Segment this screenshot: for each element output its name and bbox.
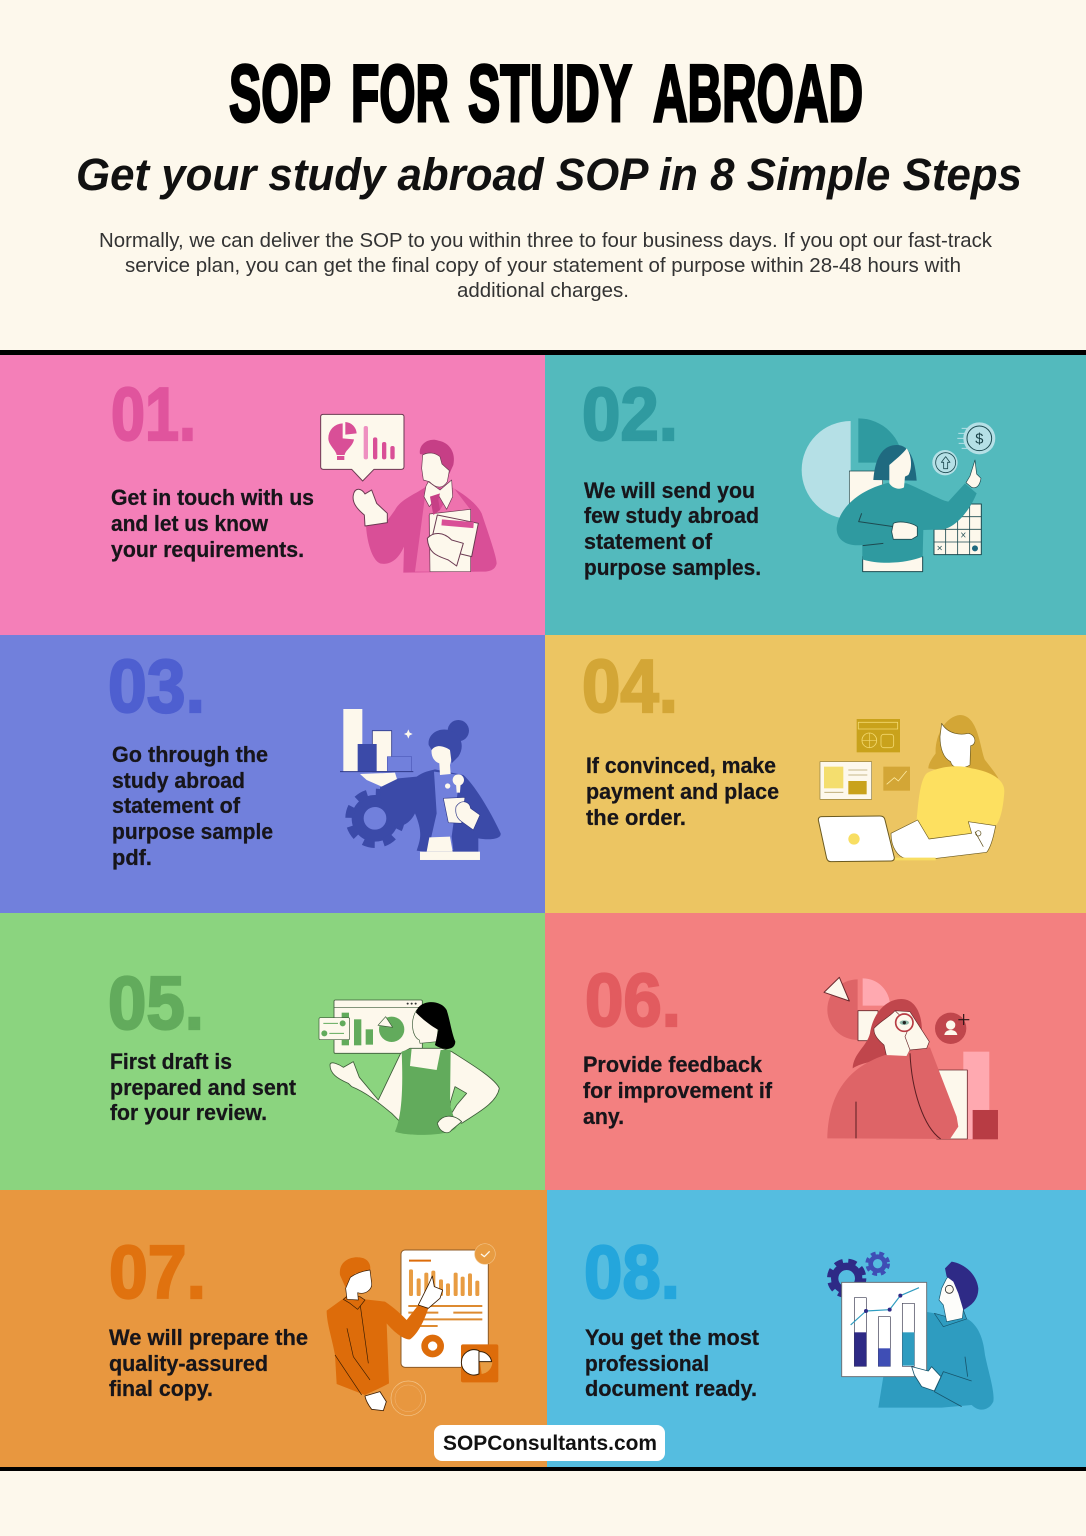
intro paragraph — [99, 229, 993, 302]
panel: step 03 — [0, 635, 545, 913]
subtitle: Get your study abroad SOP in 8 Simple Steps — [76, 149, 1022, 200]
icon: man presenting report — [327, 1244, 498, 1416]
step 04 text: the order. — [586, 805, 686, 830]
panel: step 01 — [0, 355, 545, 635]
step 01 text: and let us know — [111, 511, 269, 536]
step number 04: 04. — [582, 644, 678, 728]
icon: woman pointing at coin — [802, 418, 995, 572]
step number 03: 03. — [108, 644, 205, 728]
title: ABROAD — [653, 49, 863, 139]
step 03 text: pdf. — [112, 845, 152, 870]
step 02 text: few study abroad — [584, 503, 759, 528]
intro paragraph: Normally, we can deliver the SOP to you within three to four business days. If you opt our fast-track — [99, 229, 993, 252]
step 04 text — [586, 753, 779, 830]
website badge: SOPConsultants.com — [443, 1432, 657, 1455]
step 03 text — [112, 742, 273, 870]
step 03 text: purpose sample — [112, 819, 273, 844]
icon: woman at laptop — [818, 715, 1004, 862]
icon: man with speech bubble — [321, 414, 497, 573]
step 08 text: professional — [585, 1351, 709, 1376]
step 07 text — [109, 1325, 308, 1401]
step 03 text: study abroad — [112, 768, 245, 793]
icon: woman pointing at coin: $ — [975, 431, 983, 447]
title: STUDY — [468, 49, 632, 139]
title — [229, 49, 863, 139]
intro paragraph: additional charges. — [457, 279, 629, 302]
icon: man with chart board — [830, 1253, 994, 1410]
step 02 text: purpose samples. — [584, 555, 761, 580]
step number 01: 01. — [111, 372, 196, 456]
step number 07: 07. — [109, 1230, 206, 1314]
step 01 text — [111, 485, 314, 562]
panel: step 07 — [0, 1190, 547, 1467]
step number 08: 08. — [584, 1230, 680, 1314]
step 02 text: statement of — [584, 529, 713, 554]
step 01 text: Get in touch with us — [111, 485, 314, 510]
step 03 text: Go through the — [112, 742, 268, 767]
step 04 text: payment and place — [586, 779, 779, 804]
panel: step 04 — [545, 635, 1086, 913]
step 07 text: quality-assured — [109, 1351, 268, 1376]
icon: woman with magnifier — [824, 977, 998, 1139]
icon: woman with gear and bars — [340, 709, 501, 860]
panel: step 02 — [545, 355, 1086, 635]
step 02 text: We will send you — [584, 478, 755, 503]
step 06 text — [583, 1052, 773, 1129]
step number 02: 02. — [582, 372, 678, 456]
step 05 text: First draft is — [110, 1049, 232, 1074]
intro paragraph: service plan, you can get the final copy of your statement of purpose within 28-48 hours with — [125, 254, 961, 277]
step number 05: 05. — [108, 961, 204, 1045]
step 03 text: statement of — [112, 793, 241, 818]
step 07 text: final copy. — [109, 1376, 213, 1401]
title: FOR — [351, 49, 449, 139]
panel: step 06 — [545, 913, 1086, 1190]
panel: step 05 — [0, 913, 545, 1190]
step 05 text — [110, 1049, 297, 1125]
step 08 text: document ready. — [585, 1376, 757, 1401]
step 06 text: any. — [583, 1104, 624, 1129]
website badge — [434, 1425, 665, 1461]
step 05 text: prepared and sent — [110, 1075, 297, 1100]
step 06 text: Provide feedback — [583, 1052, 763, 1077]
step 04 text: If convinced, make — [586, 753, 776, 778]
step 08 text: You get the most — [585, 1325, 760, 1350]
step 02 text — [584, 478, 761, 580]
step number 06: 06. — [585, 958, 681, 1042]
panel: step 08 — [547, 1190, 1086, 1467]
step 08 text — [585, 1325, 760, 1401]
step 05 text: for your review. — [110, 1100, 267, 1125]
title: SOP — [229, 49, 331, 139]
step 06 text: for improvement if — [583, 1078, 773, 1103]
step 07 text: We will prepare the — [109, 1325, 308, 1350]
step 01 text: your requirements. — [111, 537, 304, 562]
icon: woman with dashboard — [319, 1000, 499, 1135]
